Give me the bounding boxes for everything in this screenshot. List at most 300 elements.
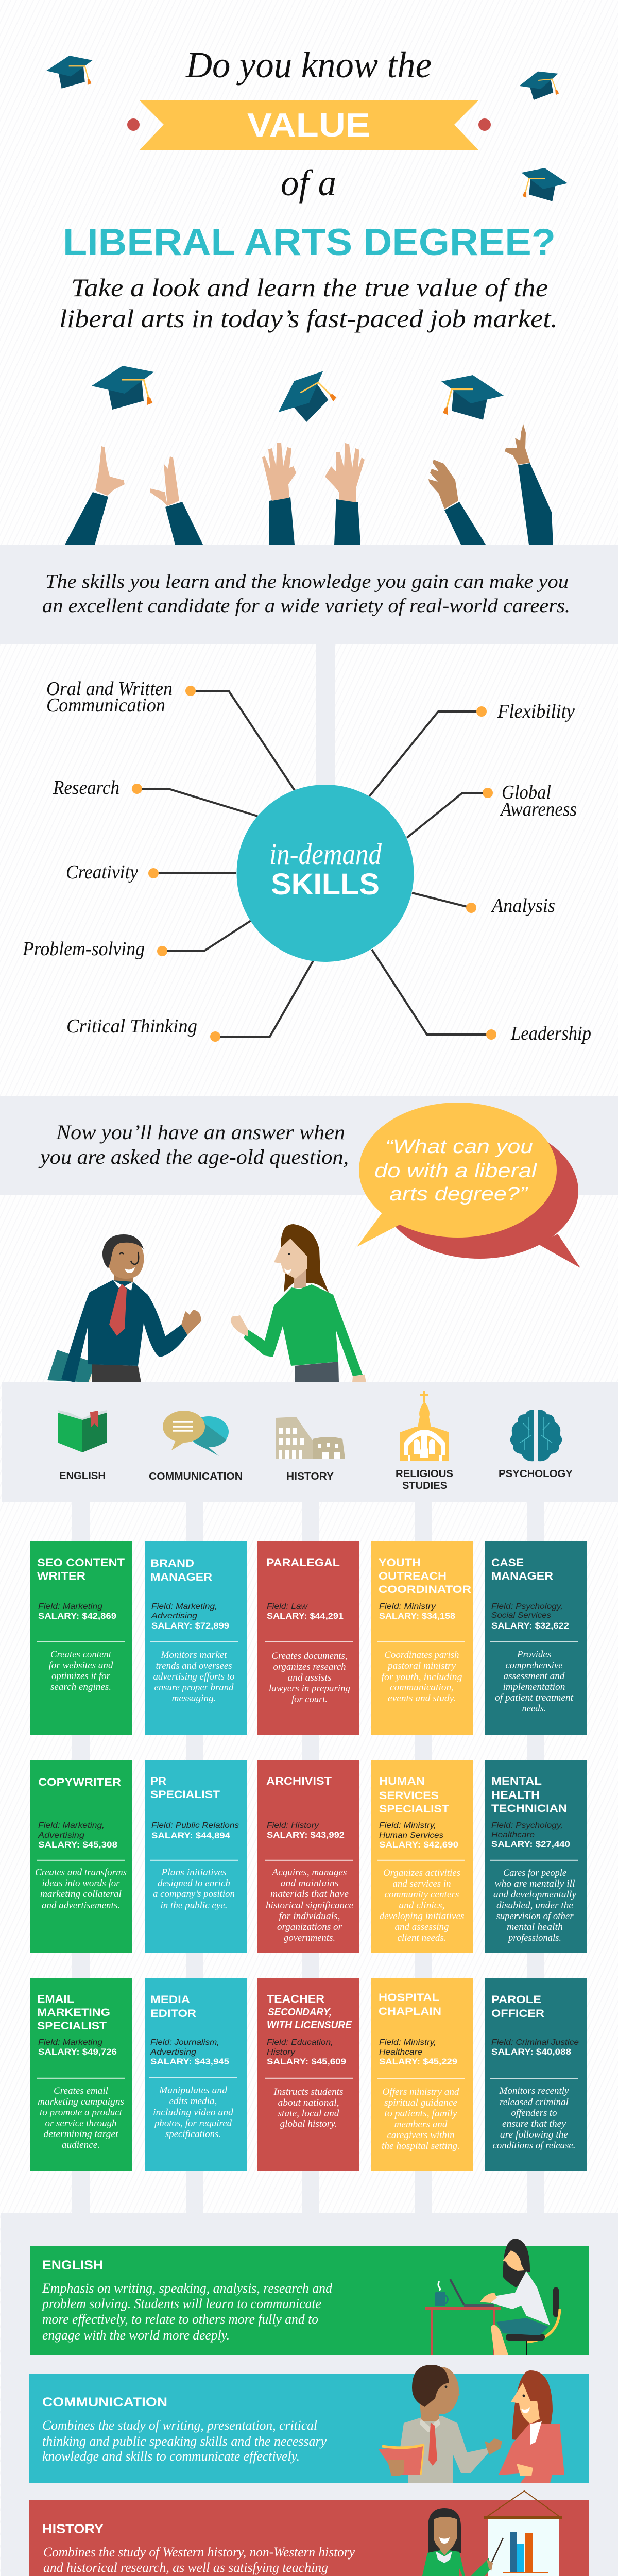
- job description: for court.: [291, 1694, 328, 1705]
- illustration: woman at desk: [425, 2239, 560, 2355]
- job description: and maintains: [280, 1878, 339, 1889]
- job description: Monitors market: [160, 1650, 227, 1660]
- job title: [37, 1557, 125, 1582]
- job description: professionals.: [507, 1933, 561, 1943]
- job title: SPECIALIST: [379, 1803, 449, 1815]
- field and salary: Field: History: [267, 1821, 319, 1830]
- field and salary: Field: Psychology,: [491, 1602, 563, 1611]
- band: age-old question: [0, 1096, 618, 1195]
- description: problem solving. Students will learn to communicate: [41, 2296, 321, 2311]
- skills intro text: [42, 571, 570, 617]
- field and salary: [267, 1602, 344, 1621]
- raised hands: [65, 424, 553, 545]
- field and salary: [379, 1602, 455, 1621]
- job description: members and: [394, 2119, 448, 2130]
- job description: Plans initiatives: [161, 1867, 227, 1878]
- job description: Manipulates and: [159, 2085, 228, 2096]
- center circle: in-demand skills: SKILLS: [271, 868, 380, 901]
- field and salary: [38, 1821, 117, 1850]
- field and salary: Field: Ministry,: [379, 2038, 436, 2047]
- job description: or service through: [45, 2118, 116, 2129]
- job description: community centers: [384, 1889, 459, 1900]
- job description: materials that have: [270, 1889, 349, 1900]
- job description: [35, 1867, 127, 1911]
- arm 3: [262, 443, 296, 545]
- job description: [38, 2086, 124, 2150]
- field and salary: Advertising: [38, 1831, 84, 1840]
- job title: TECHNICIAN: [491, 1803, 567, 1815]
- job title: EDITOR: [150, 2008, 196, 2020]
- speech bubbles: arts degree?”: [389, 1183, 529, 1205]
- job description: ideas into words for: [42, 1878, 120, 1889]
- job title: [491, 1775, 567, 1815]
- job title: [150, 1775, 220, 1801]
- job description: disabled, under the: [496, 1900, 573, 1911]
- field and salary: SALARY: $43,992: [267, 1830, 345, 1840]
- job title: [491, 1557, 553, 1582]
- job title: WRITER: [37, 1570, 85, 1582]
- description: Emphasis on writing, speaking, analysis, research and: [42, 2281, 333, 2296]
- speech bubbles: [357, 1103, 580, 1268]
- card: human services specialist: [371, 1760, 473, 1953]
- center circle: in-demand skills: in-demand: [269, 837, 382, 871]
- field and salary: Human Services: [379, 1831, 443, 1840]
- icon: graduation cap: [269, 366, 341, 432]
- illustration: woman in green: [231, 1224, 366, 1382]
- job title: COORDINATOR: [379, 1584, 471, 1596]
- job description: [266, 1867, 353, 1943]
- job description: released criminal: [500, 2097, 569, 2108]
- job description: in the public eye.: [161, 1900, 228, 1911]
- band: majors: [2, 1382, 618, 1502]
- job description: a company’s position: [153, 1889, 235, 1900]
- job description: about national,: [278, 2097, 339, 2108]
- heading: COMMUNICATION: [42, 2395, 167, 2410]
- job description: ensure that they: [502, 2119, 566, 2129]
- skill: oral and written communication: Oral and Written: [46, 678, 173, 700]
- major: religious studies: STUDIES: [402, 1480, 447, 1492]
- icon: speech bubbles: [163, 1411, 229, 1456]
- skill: analysis: Analysis: [490, 895, 555, 917]
- title line 1: Do you know the: [185, 44, 432, 86]
- job title: CHAPLAIN: [379, 2006, 441, 2018]
- description: thinking and public speaking skills and the necessary: [42, 2434, 327, 2449]
- job description: [379, 1868, 465, 1943]
- field and salary: SALARY: $49,726: [38, 2047, 117, 2057]
- job description: Offers ministry and: [382, 2087, 459, 2097]
- job description: [492, 2086, 576, 2151]
- speech bubbles: do with a liberal: [374, 1160, 538, 1182]
- job description: offenders to: [511, 2108, 557, 2119]
- skill: creativity: [66, 861, 236, 883]
- job description: [493, 1868, 577, 1943]
- card: copywriter: [30, 1760, 132, 1953]
- job description: the hospital setting.: [382, 2141, 460, 2151]
- skill: global awareness: [407, 782, 577, 838]
- job description: [153, 2085, 234, 2140]
- job description: developing initiatives: [379, 1911, 465, 1922]
- job description: needs.: [522, 1703, 546, 1714]
- band: intro to skills: [0, 545, 618, 799]
- card: archivist: [258, 1760, 359, 1953]
- skill: oral and written communication: Communication: [46, 694, 165, 716]
- field and salary: Advertising: [150, 2048, 196, 2057]
- job title: MARKETING: [37, 2007, 110, 2019]
- job description: audience.: [62, 2140, 100, 2150]
- job title: WITH LICENSURE: [267, 2020, 352, 2031]
- skill: analysis: [412, 893, 555, 917]
- job title: SPECIALIST: [37, 2020, 107, 2032]
- field and salary: [491, 1602, 569, 1631]
- job description: governments.: [284, 1933, 335, 1943]
- question text: Now you’ll have an answer when: [56, 1121, 345, 1144]
- job description: messaging.: [172, 1693, 216, 1704]
- card: teacher: [258, 1978, 359, 2171]
- icon: graduation cap: [441, 375, 504, 420]
- job title: MANAGER: [491, 1570, 553, 1582]
- field and salary: [491, 2038, 579, 2057]
- illustration: teacher with chart: [406, 2491, 562, 2576]
- job title: PARALEGAL: [266, 1557, 340, 1569]
- card: hospital chaplain: [371, 1978, 473, 2171]
- job description: historical significance: [266, 1900, 353, 1911]
- field and salary: SALARY: $43,945: [150, 2057, 229, 2066]
- major: psychology: [499, 1410, 573, 1480]
- description: engage with the world more deeply.: [42, 2328, 230, 2343]
- skill: global awareness: Global: [502, 782, 551, 803]
- card: case manager: [485, 1541, 587, 1735]
- job description: and clinics,: [399, 1900, 445, 1911]
- skill: oral and written communication: [46, 678, 295, 790]
- field and salary: SALARY: $44,894: [151, 1831, 231, 1840]
- job description: for individuals,: [279, 1911, 340, 1922]
- job description: Creates documents,: [272, 1651, 347, 1662]
- field and salary: Field: Marketing: [38, 2038, 102, 2047]
- job description: Provides: [517, 1649, 551, 1660]
- job description: mental health: [507, 1922, 563, 1933]
- skills diagram: [22, 678, 591, 1044]
- illustration: man with book: [47, 1234, 201, 1382]
- icon: church: [400, 1391, 449, 1461]
- job description: photos, for required: [153, 2118, 232, 2129]
- question text: [38, 1121, 349, 1168]
- job title: PR: [150, 1775, 166, 1787]
- job description: spiritual guidance: [384, 2097, 457, 2108]
- field and salary: Field: Marketing,: [38, 1821, 105, 1830]
- job title: EMAIL: [37, 1993, 74, 2005]
- field and salary: SALARY: $45,308: [38, 1840, 117, 1850]
- field and salary: SALARY: $40,088: [491, 2047, 571, 2057]
- job title: CASE: [491, 1557, 524, 1569]
- job description: [381, 1650, 462, 1704]
- field and salary: [151, 1602, 229, 1631]
- title: [63, 44, 556, 263]
- icon: graduation cap: [521, 168, 568, 201]
- icon: brain: [510, 1410, 562, 1461]
- job description: are following the: [500, 2129, 568, 2140]
- job description: [495, 1649, 574, 1714]
- field and salary: Field: Education,: [267, 2038, 333, 2047]
- job description: assessment and: [504, 1671, 565, 1682]
- job description: events and study.: [388, 1693, 456, 1704]
- job title: [267, 1993, 352, 2031]
- job description: and services in: [392, 1878, 451, 1889]
- field and salary: Healthcare: [379, 2048, 422, 2057]
- job title: BRAND: [150, 1557, 194, 1569]
- job description: Monitors recently: [499, 2086, 569, 2096]
- job description: optimizes it for: [52, 1671, 111, 1682]
- field and salary: [38, 1602, 116, 1621]
- card: media editor: [145, 1978, 247, 2171]
- job description: [153, 1867, 235, 1911]
- job description: organizations or: [277, 1922, 342, 1933]
- skill: research: Research: [53, 777, 119, 799]
- icon: graduation cap: [46, 56, 93, 89]
- skill: flexibility: [369, 701, 575, 796]
- arm 2: [150, 456, 203, 545]
- subtitle: Take a look and learn the true value of the: [71, 273, 548, 302]
- major: history: [276, 1417, 345, 1482]
- job description: for websites and: [48, 1660, 113, 1671]
- field and salary: Field: Marketing: [38, 1602, 102, 1611]
- job title: COPYWRITER: [38, 1776, 121, 1788]
- icon: book: [58, 1410, 107, 1452]
- panel: majors detail background: [1, 2213, 618, 2576]
- job title: HUMAN: [379, 1775, 425, 1787]
- job description: marketing collateral: [40, 1889, 122, 1900]
- job title: [150, 1557, 212, 1583]
- job description: Acquires, manages: [271, 1867, 347, 1878]
- job title: HOSPITAL: [379, 1992, 439, 2004]
- job title: [379, 1992, 441, 2018]
- heading: ENGLISH: [42, 2258, 103, 2273]
- job description: Creates email: [54, 2086, 108, 2096]
- job description: [48, 1649, 113, 1692]
- job title: ARCHIVIST: [266, 1775, 332, 1787]
- skill: problem-solving: [22, 921, 251, 960]
- card: paralegal: [258, 1541, 359, 1735]
- job description: designed to enrich: [158, 1878, 230, 1889]
- description: more effectively, to relate to others more fully and to: [42, 2312, 318, 2327]
- field and salary: [491, 1821, 570, 1849]
- job description: communication,: [390, 1682, 454, 1693]
- job title: [379, 1557, 471, 1596]
- job description: [382, 2087, 460, 2151]
- field and salary: [379, 2038, 457, 2066]
- job description: [153, 1650, 235, 1704]
- icon: graduation cap: [92, 366, 154, 410]
- field and salary: Field: Criminal Justice: [491, 2038, 579, 2047]
- job description: implementation: [503, 1682, 565, 1692]
- job title: SPECIALIST: [150, 1789, 220, 1801]
- job title: [150, 1994, 196, 2020]
- field and salary: [38, 2038, 117, 2057]
- skill: global awareness: Awareness: [499, 799, 577, 820]
- job description: state, local and: [278, 2108, 339, 2119]
- field and salary: SALARY: $42,869: [38, 1611, 116, 1621]
- field and salary: Field: Ministry: [379, 1602, 436, 1611]
- skill: leadership: [372, 950, 591, 1044]
- skill: problem-solving: Problem-solving: [22, 938, 145, 960]
- job title: MENTAL: [491, 1775, 542, 1787]
- field and salary: [267, 1821, 345, 1840]
- description: [42, 2418, 327, 2464]
- job description: [269, 1651, 350, 1705]
- card: mental health technician: [485, 1760, 587, 1953]
- field and salary: Advertising: [151, 1612, 197, 1620]
- job title: HEALTH: [491, 1789, 540, 1801]
- card: PR specialist: [145, 1760, 247, 1953]
- field and salary: History: [267, 2048, 296, 2057]
- description: Combines the study of Western history, non-Western history: [43, 2545, 355, 2560]
- field and salary: Healthcare: [491, 1831, 535, 1839]
- subtitle: liberal arts in today’s fast-paced job market.: [59, 304, 558, 333]
- job title: OUTREACH: [379, 1570, 447, 1582]
- major: psychology: PSYCHOLOGY: [499, 1468, 573, 1480]
- field and salary: Field: Marketing,: [151, 1602, 217, 1611]
- banner: communication: [29, 2365, 589, 2483]
- major: religious studies: [396, 1391, 453, 1492]
- job title: [491, 1994, 544, 2020]
- illustration: two colleagues talking: [379, 2365, 564, 2483]
- job description: [273, 2087, 343, 2129]
- field and salary: SALARY: $72,899: [151, 1621, 229, 1631]
- job description: supervision of other: [496, 1911, 574, 1922]
- field and salary: Field: Psychology,: [491, 1821, 563, 1830]
- card: email marketing specialist: [30, 1978, 132, 2171]
- major: english: [58, 1410, 107, 1482]
- job description: and advertisements.: [42, 1900, 120, 1911]
- description: [43, 2545, 355, 2576]
- job description: Coordinates parish: [384, 1650, 459, 1660]
- skills intro text: The skills you learn and the knowledge you gain can make you: [45, 571, 569, 592]
- major: english: ENGLISH: [59, 1470, 106, 1482]
- job description: Creates and transforms: [35, 1867, 127, 1878]
- field and salary: [267, 2038, 346, 2066]
- job title: MANAGER: [150, 1571, 212, 1583]
- icon: colosseum: [276, 1417, 345, 1459]
- job description: and developmentally: [493, 1889, 577, 1900]
- job description: Cares for people: [503, 1868, 566, 1878]
- skill: critical thinking: [66, 961, 313, 1042]
- arm 4: [325, 443, 365, 545]
- banner: history: [29, 2491, 589, 2576]
- description: and historical research, as well as satisfying teaching: [43, 2560, 328, 2575]
- description: Combines the study of writing, presentation, critical: [42, 2418, 317, 2433]
- job description: comprehensive: [506, 1660, 562, 1671]
- card: brand manager: [145, 1541, 247, 1735]
- job description: advertising efforts to: [153, 1671, 235, 1682]
- job description: Instructs students: [273, 2087, 343, 2097]
- field and salary: SALARY: $34,158: [379, 1611, 455, 1621]
- job description: caregivers within: [387, 2130, 454, 2141]
- speech bubbles: “What can you: [385, 1136, 533, 1158]
- job title: [37, 1993, 110, 2032]
- question text: you are asked the age-old question,: [38, 1145, 349, 1168]
- job description: including video and: [153, 2107, 234, 2118]
- job title: TEACHER: [267, 1993, 324, 2005]
- arm 5: [428, 460, 486, 545]
- job title: SERVICES: [379, 1790, 439, 1802]
- job description: conditions of release.: [492, 2140, 576, 2151]
- job description: trends and oversees: [156, 1660, 232, 1671]
- title line 4: LIBERAL ARTS DEGREE?: [63, 222, 556, 263]
- job description: who are mentally ill: [494, 1878, 575, 1889]
- major: communication: [149, 1411, 243, 1482]
- job description: edits media,: [169, 2096, 217, 2107]
- major: history: HISTORY: [286, 1471, 334, 1482]
- job title: MEDIA: [150, 1994, 190, 2006]
- icon: graduation cap: [518, 70, 560, 101]
- job description: to promote a product: [40, 2107, 123, 2118]
- job title: SEO CONTENT: [37, 1557, 125, 1569]
- field and salary: SALARY: $32,622: [491, 1621, 569, 1631]
- skills intro text: an excellent candidate for a wide variety of real-world careers.: [42, 595, 570, 617]
- card: parole officer: [485, 1978, 587, 2171]
- skill: research: [53, 777, 258, 816]
- arm 1: [65, 446, 125, 545]
- job title: OFFICER: [491, 2008, 544, 2020]
- job title: YOUTH: [379, 1557, 421, 1569]
- skill: flexibility: Flexibility: [497, 701, 575, 722]
- job description: and assists: [287, 1672, 332, 1683]
- field and salary: [150, 2038, 229, 2066]
- field and salary: Field: Public Relations: [151, 1821, 239, 1830]
- skill: leadership: Leadership: [510, 1023, 591, 1044]
- job description: Organizes activities: [383, 1868, 460, 1878]
- field and salary: [151, 1821, 239, 1840]
- description: knowledge and skills to communicate effectively.: [42, 2449, 300, 2464]
- job description: and assessing: [394, 1922, 449, 1933]
- field and salary: Field: Law: [267, 1602, 308, 1611]
- job description: to patients, family: [384, 2108, 457, 2119]
- card: SEO content writer: [30, 1541, 132, 1735]
- field and salary: [379, 1821, 458, 1850]
- job description: global history.: [280, 2119, 337, 2129]
- field and salary: SALARY: $45,609: [267, 2057, 346, 2066]
- field and salary: Field: Ministry,: [379, 1821, 436, 1830]
- field and salary: SALARY: $42,690: [379, 1840, 458, 1850]
- job description: for youth, including: [381, 1672, 462, 1683]
- job description: marketing campaigns: [38, 2096, 124, 2107]
- field and salary: SALARY: $45,229: [379, 2057, 457, 2066]
- job description: determining target: [43, 2129, 118, 2140]
- ribbon: value: [127, 100, 491, 150]
- job description: pastoral ministry: [387, 1660, 456, 1671]
- skill: creativity: Creativity: [66, 861, 138, 883]
- job title: [379, 1775, 449, 1815]
- card: youth outreach coordinator: [371, 1541, 473, 1735]
- job description: lawyers in preparing: [269, 1683, 350, 1694]
- field and salary: Field: Journalism,: [150, 2038, 219, 2047]
- arm 6: [505, 424, 553, 545]
- job description: ensure proper brand: [154, 1682, 234, 1693]
- job title: PAROLE: [491, 1994, 541, 2006]
- subtitle: [59, 273, 558, 333]
- ribbon: value: VALUE: [247, 106, 370, 144]
- title line 3: of a: [281, 162, 336, 204]
- job description: client needs.: [398, 1933, 446, 1943]
- heading: HISTORY: [42, 2522, 104, 2536]
- job description: Creates content: [50, 1649, 112, 1660]
- center circle: in-demand skills: [237, 785, 414, 962]
- field and salary: SALARY: $44,291: [267, 1611, 344, 1621]
- job description: search engines.: [50, 1682, 111, 1692]
- field and salary: SALARY: $27,440: [491, 1839, 570, 1849]
- job title: SECONDARY,: [268, 2007, 332, 2018]
- skill: critical thinking: Critical Thinking: [66, 1015, 197, 1037]
- description: [41, 2281, 333, 2343]
